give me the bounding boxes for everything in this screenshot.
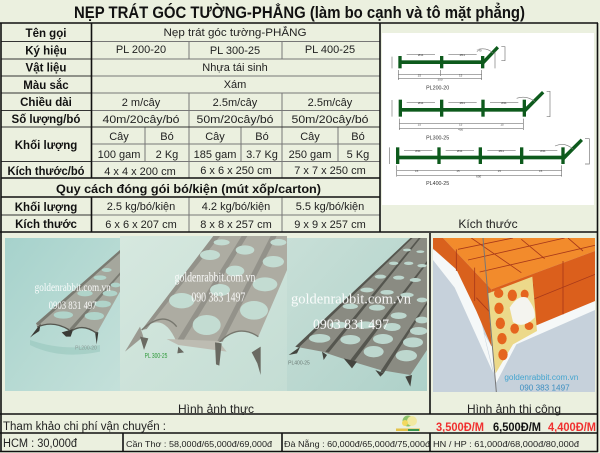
row: Khối lượng per piece and bundle: Khối lượng (15, 140, 77, 152)
title: NẸP TRÁT GÓC TƯỜNG-PHẲNG (làm bo cạnh và tô mặt phẳng) (74, 3, 525, 22)
row: Vật liệu (26, 62, 268, 74)
row: Tên gọi: Tên gọi (26, 28, 66, 40)
diagram: PL400-25: 600 (476, 174, 481, 178)
row: Màu sắc: Xám (224, 79, 246, 91)
diagram: PL300-25: Ø11 (501, 101, 507, 105)
row: Khối lượng per piece and bundle (15, 131, 369, 161)
shipping: HCM: HCM : 30,000đ (3, 438, 78, 450)
caption: Hình ảnh thi công: Hình ảnh thi công (467, 402, 561, 416)
photo: PL 200-20 (5, 238, 120, 391)
row: packaging weight: 2.5 kg/bó/kiện (107, 201, 175, 213)
photo: PL 200-20: 0903 831 497 (49, 298, 97, 312)
row: packaging size: 9 x 9 x 257 cm (294, 219, 366, 231)
row: packaging weight: 4.2 kg/bó/kiện (202, 201, 270, 213)
row: Chiều dài: Chiều dài (20, 97, 72, 109)
row: Khối lượng per piece and bundle: Bó (160, 131, 174, 143)
photo: PL 400-25 (287, 238, 427, 391)
row: Khối lượng per piece and bundle: Bó (255, 131, 269, 143)
diagram: PL400-25: Ø11 (499, 149, 504, 153)
diagram: PL400-25 (389, 139, 589, 187)
row: packaging size (15, 219, 366, 231)
diagram: PL200-20: PL200-20 (426, 86, 449, 92)
shipping: Đà Nẵng: Đà Nẵng : 60,000đ/65,000đ/75,000đ (284, 439, 430, 449)
row: Ký hiệu (25, 44, 355, 58)
diagram: PL400-25: Ø11 (415, 149, 421, 153)
diagram: PL300-25: Ø11 (418, 101, 424, 105)
diagram: PL400-25: Ø11 (540, 149, 546, 153)
row: Số lượng/bó (12, 114, 368, 126)
price per metre: 4,400Đ/M (548, 422, 596, 434)
row: packaging weight: 5.5 kg/bó/kiện (296, 201, 364, 213)
row: Chiều dài: 2.5m/cây (213, 97, 258, 109)
row: packaging weight: Khối lượng (15, 202, 77, 214)
diagram: PL200-20: Ø11 (418, 53, 424, 57)
diagram: PL200-20: Ø11 (460, 53, 465, 57)
row: Số lượng/bó: 50m/20cây/bó (292, 114, 368, 126)
row: Khối lượng per piece and bundle: Cây (205, 131, 225, 143)
panel: size diagrams (382, 33, 594, 205)
photo: PL 400-25: PL400-25 (288, 360, 310, 366)
row: Khối lượng per piece and bundle: Bó (351, 131, 365, 143)
diagram: PL300-25: 15 (459, 122, 463, 126)
photo: installation corner (433, 238, 595, 392)
shipping: HN / HP: HN / HP : 61,000đ/68,000đ/80,000đ (433, 439, 579, 449)
row: packaging size: 6 x 6 x 207 cm (105, 219, 177, 231)
photo: PL 400-25: 0903 831 497 (313, 317, 389, 333)
row: Kích thước/bó: 6 x 6 x 250 cm (200, 165, 272, 177)
diagram: PL300-25: PL300-25 (426, 135, 449, 141)
row: Kích thước/bó: 7 x 7 x 250 cm (294, 165, 366, 177)
heading: packaging: Quy cách đóng gói bó/kiện (mút xốp/carton) (56, 184, 321, 196)
row: Màu sắc (23, 79, 246, 92)
row: Số lượng/bó: 50m/20cây/bó (196, 114, 274, 126)
photo: PL 300-25: 090 383 1497 (191, 291, 245, 306)
row: Khối lượng per piece and bundle: 3.7 Kg (246, 149, 278, 161)
row: packaging size: 8 x 8 x 257 cm (200, 219, 272, 231)
row: Màu sắc: Màu sắc (23, 79, 69, 92)
photo: PL 400-25: goldenrabbit.com.vn (291, 291, 412, 307)
row: Chiều dài: 2.5m/cây (308, 97, 353, 109)
diagram: PL200-20: 15 (418, 73, 421, 77)
diagram: PL300-25: 15 (500, 122, 504, 126)
row: Kích thước/bó (8, 165, 366, 178)
photo: PL 300-25 (120, 236, 287, 391)
shipping heading: Tham khảo chi phí vận chuyển : (3, 421, 166, 433)
diagram: PL200-20: 140 (477, 49, 482, 53)
row: Tên gọi: Nẹp trát góc tường-PHẲNG (164, 26, 306, 39)
row: Khối lượng per piece and bundle: 2 Kg (156, 149, 178, 161)
caption: Hình ảnh thực: Hình ảnh thực (178, 402, 254, 416)
row: Ký hiệu: Ký hiệu (25, 46, 67, 58)
shipping: Cần Thơ: Cần Thơ : 58,000đ/65,000đ/69,000đ (126, 439, 272, 449)
row: Kích thước/bó: 4 x 4 x 200 cm (104, 166, 176, 178)
caption: Kích thước: Kích thước (458, 217, 518, 231)
diagram: PL400-25: Ø11 (457, 149, 463, 153)
diagram: PL400-25: PL400-25 (426, 181, 449, 187)
diagram: PL300-25: 15 (418, 122, 421, 126)
diagram: PL300-25: 450 (458, 127, 463, 131)
row: Vật liệu: Vật liệu (26, 62, 66, 74)
price per metre: 3,500Đ/M (436, 422, 484, 434)
row: packaging weight (15, 201, 364, 214)
row: Khối lượng per piece and bundle: Cây (109, 131, 129, 143)
row: Kích thước/bó: Kích thước/bó (8, 166, 84, 178)
row: packaging size: Kích thước (15, 219, 78, 231)
photo: PL 300-25: PL 300-25 (145, 351, 167, 360)
row: Số lượng/bó: 40m/20cây/bó (102, 114, 180, 126)
row: Ký hiệu: PL 200-20 (116, 44, 166, 56)
diagram: PL400-25: 15 (498, 169, 501, 173)
photo: installation corner: goldenrabbit.com.vn (504, 373, 578, 382)
photo: PL 200-20: PL200-20 (75, 345, 97, 351)
diagram: PL200-20: 15 (459, 73, 463, 77)
diagram: PL200-20 (392, 46, 505, 92)
row: Chiều dài (20, 97, 353, 109)
price per metre (436, 422, 596, 434)
row: Khối lượng per piece and bundle: Cây (300, 131, 320, 143)
row: Vật liệu: Nhựa tái sinh (202, 62, 268, 74)
row: Ký hiệu: PL 400-25 (305, 44, 355, 56)
row: Chiều dài: 2 m/cây (122, 97, 161, 109)
row: Khối lượng per piece and bundle: 5 Kg (347, 149, 369, 161)
diagram: PL400-25: 15 (456, 169, 460, 173)
row: Khối lượng per piece and bundle: 185 gam (194, 149, 236, 161)
diagram: PL400-25: 15 (539, 169, 543, 173)
diagram: PL300-25: Ø11 (460, 101, 465, 105)
diagram: PL400-25: 15 (415, 169, 419, 173)
row: Khối lượng per piece and bundle: 100 gam (98, 149, 140, 161)
diagram: PL200-20: 300 (438, 77, 443, 81)
diagram: PL300-25 (392, 91, 550, 141)
row: Khối lượng per piece and bundle: 250 gam (289, 149, 331, 161)
photo: installation corner: 090 383 1497 (520, 383, 570, 392)
row: Ký hiệu: PL 300-25 (210, 45, 260, 57)
price per metre: 6,500Đ/M (493, 422, 541, 434)
row: Tên gọi (26, 26, 306, 40)
row: Số lượng/bó: Số lượng/bó (12, 114, 80, 126)
logo: golden rabbit (396, 416, 420, 431)
